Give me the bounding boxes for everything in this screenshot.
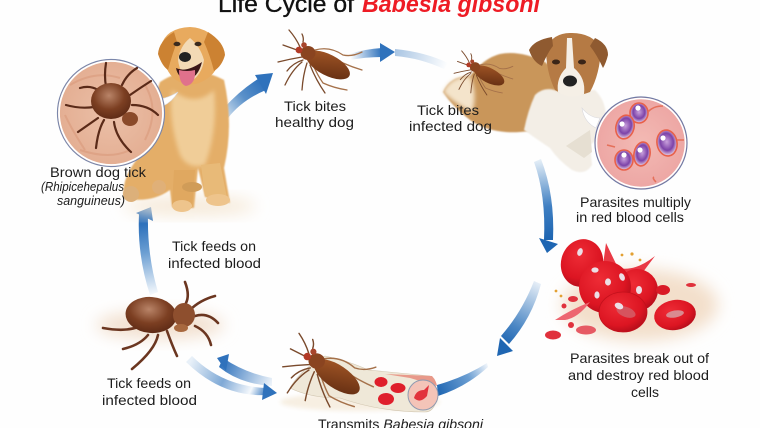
- icon: tick on vessel: [279, 332, 379, 412]
- callout: brown dog tick magnifier: [58, 60, 178, 166]
- label: tick bites healthy dog: Tick bites: [284, 98, 346, 114]
- arrow: double arrows bottom left: [186, 354, 277, 400]
- label: tick bites infected dog: infected dog: [409, 118, 492, 134]
- icon: tick in magnifier: [66, 63, 158, 152]
- label: tick feeds upper: [168, 238, 261, 271]
- icon: tick on infected dog: [454, 51, 513, 95]
- label: brown dog tick: Brown dog tick: [50, 164, 147, 180]
- label: parasites break out: Parasites break out of: [570, 350, 709, 366]
- label: tick feeds lower: [102, 375, 197, 408]
- label: tick feeds lower: Tick feeds on: [107, 375, 191, 391]
- arrow: infected dog to multiply: [534, 159, 558, 253]
- golden dog: [123, 27, 256, 215]
- arrow: transmits tail: [437, 363, 488, 396]
- label: parasites break out: [568, 350, 709, 400]
- arrow: dog to tick bites healthy dog: [224, 73, 273, 118]
- infected dog: [443, 33, 608, 172]
- title: [218, 0, 541, 18]
- callout: parasites multiply magnifier: [582, 97, 687, 189]
- arrow: healthy dog to infected dog: [350, 43, 448, 69]
- arrow: break out to transmits: [497, 281, 541, 356]
- label: tick bites infected dog: [409, 102, 492, 134]
- label: tick bites healthy dog: healthy dog: [275, 114, 354, 130]
- arrow: tick to dog: [136, 207, 158, 295]
- label: tick bites infected dog: Tick bites: [417, 102, 479, 118]
- red blood cells bursting: [545, 234, 718, 341]
- label: brown dog tick: sanguineus): [57, 194, 125, 208]
- label: parasites multiply: Parasites multiply: [580, 194, 691, 210]
- blood vessel with tick: [279, 332, 440, 412]
- parasites in cells: [613, 103, 679, 170]
- label: tick feeds lower: infected blood: [102, 392, 197, 408]
- label: parasites multiply: [576, 194, 691, 225]
- label: parasites multiply: in red blood cells: [576, 209, 684, 225]
- label: parasites break out: cells: [631, 384, 659, 400]
- label: tick feeds upper: Tick feeds on: [172, 238, 256, 254]
- label: parasites break out: and destroy red blood: [568, 367, 709, 383]
- feeding tick: [96, 282, 224, 369]
- icon: tick on healthy dog: [278, 30, 362, 93]
- label: brown dog tick: (Rhipicehepalus: [41, 180, 124, 194]
- label: tick feeds upper: infected blood: [168, 255, 261, 271]
- label: brown dog tick: [41, 164, 147, 208]
- label: tick bites healthy dog: [275, 98, 354, 130]
